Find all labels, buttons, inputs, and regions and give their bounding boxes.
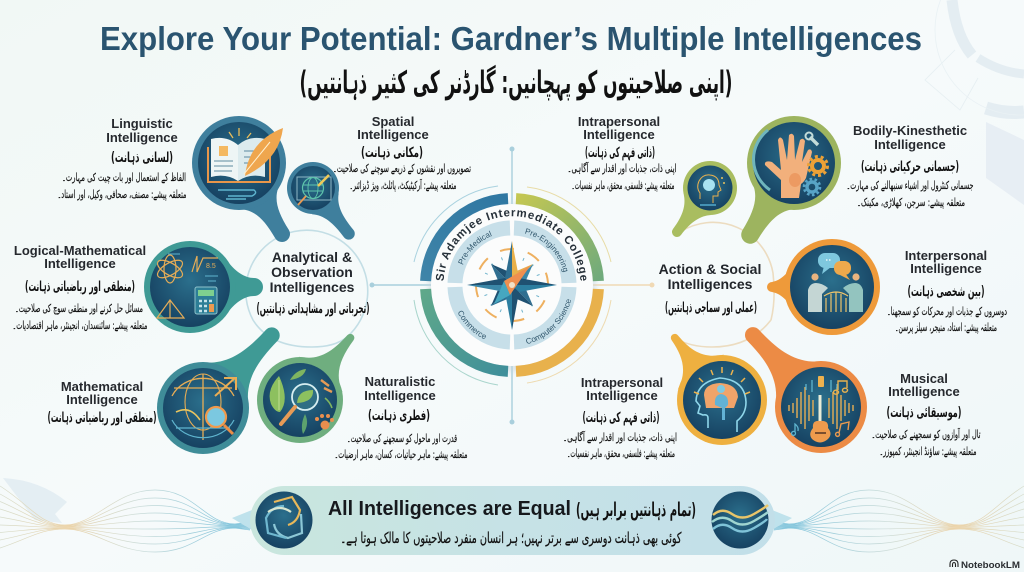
label: linguistic: Intelligence [106,130,178,145]
label: naturalistic: قدرت اور ماحول کو سمجھنے کی صلاحیت۔ [347,432,457,445]
label: logical-mathematical: مسائل حل کرنے اور منطقی سوچ کی صلاحیت۔ [15,302,143,315]
label: logical-mathematical: (منطقی اور ریاضیاتی ذہانت) [25,279,135,295]
label: spatial [333,114,471,192]
label: spatial: تصویروں اور نقشوں کے ذریعے سوچنے کی صلاحیت۔ [333,162,471,175]
inner pale ring [455,228,569,342]
label: interpersonal [887,248,1007,334]
stream: pre-medical: Pre-Medical [458,230,492,265]
connector arc: action group [675,222,774,347]
axis lines [370,146,654,424]
background decoration: bottom left shapes [3,478,67,523]
label: naturalistic [334,374,468,461]
icon: head with figure [694,367,750,432]
label: naturalistic: Naturalistic [365,374,435,389]
pin: linguistic [192,116,312,256]
icon: guitar and sound waves [789,376,853,442]
label: bodily-kinesthetic [846,123,974,209]
label: mathematical: Intelligence [66,392,138,407]
label: musical: Intelligence [888,384,960,399]
Urdu heading: (تمام ذہانتیں برابر ہیں) [576,499,696,521]
pin: interpersonal [767,239,880,335]
dashed compass ring [466,239,558,331]
group heading: analytical: Analytical & [272,249,352,265]
group heading: analytical: Observation [271,264,353,280]
label: intrapersonal bottom: اپنی ذات، جذبات اور اقدار سے آگاہی۔ [563,430,677,444]
pin: musical [726,309,867,453]
label: intrapersonal top: Intelligence [583,127,655,142]
shadow disc [428,204,596,372]
label: naturalistic: متعلقہ پیشے: ماہر حیاتیات، کسان، ماہر ارضیات۔ [334,448,468,461]
group heading: action: Action & Social [659,261,761,277]
pin: spatial [287,162,366,249]
white disc [431,204,593,366]
label: bodily-kinesthetic: Intelligence [874,137,946,152]
label: linguistic: (لسانی ذہانت) [111,150,173,166]
stream: commerce: Commerce [458,310,486,339]
label: intrapersonal top [568,114,676,193]
pin: naturalistic [257,317,375,443]
label: linguistic: متعلقہ پیشے: مصنف، صحافی، وکیل، اور استاد۔ [58,188,187,201]
label: intrapersonal bottom: (ذاتی فہم کی ذہانت) [582,410,660,426]
heading text: All Intelligences are Equal [328,498,571,520]
wave ribbon: bottom right [774,486,1024,552]
icon: hand and gears [754,130,828,198]
label: naturalistic: (فطری ذہانت) [368,408,430,424]
stream: computer science: Computer Science [526,299,571,344]
label: spatial: متعلقہ پیشے: آرکیٹیکٹ، پائلٹ، ویژ ڈیزائنر۔ [350,178,457,192]
central hub [414,186,612,386]
pin: bodily-kinesthetic [720,116,841,258]
label: bodily-kinesthetic: Bodily-Kinesthetic [853,123,967,138]
label: logical-mathematical: Logical-Mathematical [14,243,146,258]
college name: Sir Adamjee Intermediate College [436,210,586,281]
icon: chat bubbles and two people [808,253,863,312]
label: naturalistic: Intelligence [364,388,436,403]
banner: all intelligences are equal [232,486,792,555]
watermark: NotebookLM: NotebookLM [961,560,1020,571]
label: mathematical: Mathematical [61,379,143,394]
icon: atom, formulae, calculator: 8.5 [206,263,216,270]
icon: head with light bulb [698,175,725,205]
connector arc: analytical group [246,230,368,347]
label: musical [872,371,980,458]
group heading: analytical: Intelligences [270,279,355,295]
label: spatial: (مکانی ذہانت) [361,145,423,161]
group heading: analytical [256,249,370,317]
icon: leaves, magnifier, paw [270,369,334,434]
label: intrapersonal bottom: Intelligence [586,388,658,403]
coloured quadrant bands [426,199,598,371]
label: intrapersonal top: (ذاتی فہم کی ذہانت) [585,145,655,161]
group heading: action [659,261,761,316]
pin: intrapersonal bottom [649,317,767,445]
label: musical: (موسیقائی ذہانت) [886,405,962,421]
title: Explore Your Potential: Gardner’s Multiple Intelligences [100,20,922,57]
stream: pre-engineering: Pre-Engineering [525,228,568,272]
label: interpersonal: Interpersonal [905,248,987,263]
icon: waves [712,492,768,548]
label: logical-mathematical [12,243,148,332]
label: intrapersonal top: Intrapersonal [578,114,660,129]
label: linguistic [58,116,187,201]
label: interpersonal: Intelligence [910,261,982,276]
pin: mathematical [157,310,298,454]
wave ribbon: bottom left [0,486,250,552]
group heading: action: Intelligences [668,276,753,292]
label: spatial: Spatial [372,114,414,129]
label: intrapersonal bottom: Intrapersonal [581,375,663,390]
label: intrapersonal bottom: متعلقہ پیشے: فلسفی، محقق، ماہر نفسیات۔ [567,447,675,461]
label: logical-mathematical: Intelligence [44,256,116,271]
group heading: analytical: (تجرباتی اور مشاہداتی ذہانتیں) [256,301,370,317]
label: mathematical [48,379,156,426]
icon: pinwheel [256,492,312,548]
label: intrapersonal top: اپنی ذات، جذبات اور اقدار سے آگاہی۔ [568,161,676,175]
outer thin arcs [414,186,611,385]
label: logical-mathematical: متعلقہ پیشے: سائنسدان، انجینئر، ماہر اقتصادیات۔ [12,319,148,332]
icon: globe, magnifier, arrow [172,374,236,440]
label: intrapersonal bottom [563,375,677,461]
group heading: action: (عملی اور سماجی ذہانتیں) [665,300,757,316]
label: spatial: Intelligence [357,127,429,142]
label: musical: Musical [900,371,948,386]
icon: globe and pencil [297,175,331,205]
compass star [467,241,557,330]
background decoration: top right rings [925,0,1024,205]
label: intrapersonal top: متعلقہ پیشے: فلسفی، محقق، ماہر نفسیات۔ [572,179,675,193]
label: linguistic: Linguistic [111,116,173,131]
Urdu message: کوئی بھی ذہانت دوسری سے برتر نہیں؛ ہر انسان منفرد صلاحیتوں کا مالک ہوتا ہے۔ [340,529,682,547]
label: mathematical: (منطقی اور ریاضیاتی ذہانت) [48,410,156,426]
pin: logical-mathematical [144,241,263,333]
pin: intrapersonal top [660,161,737,246]
label: linguistic: الفاظ کے استعمال اور بات چیت کی مہارت۔ [62,171,186,184]
icon: book and quill [208,128,283,199]
